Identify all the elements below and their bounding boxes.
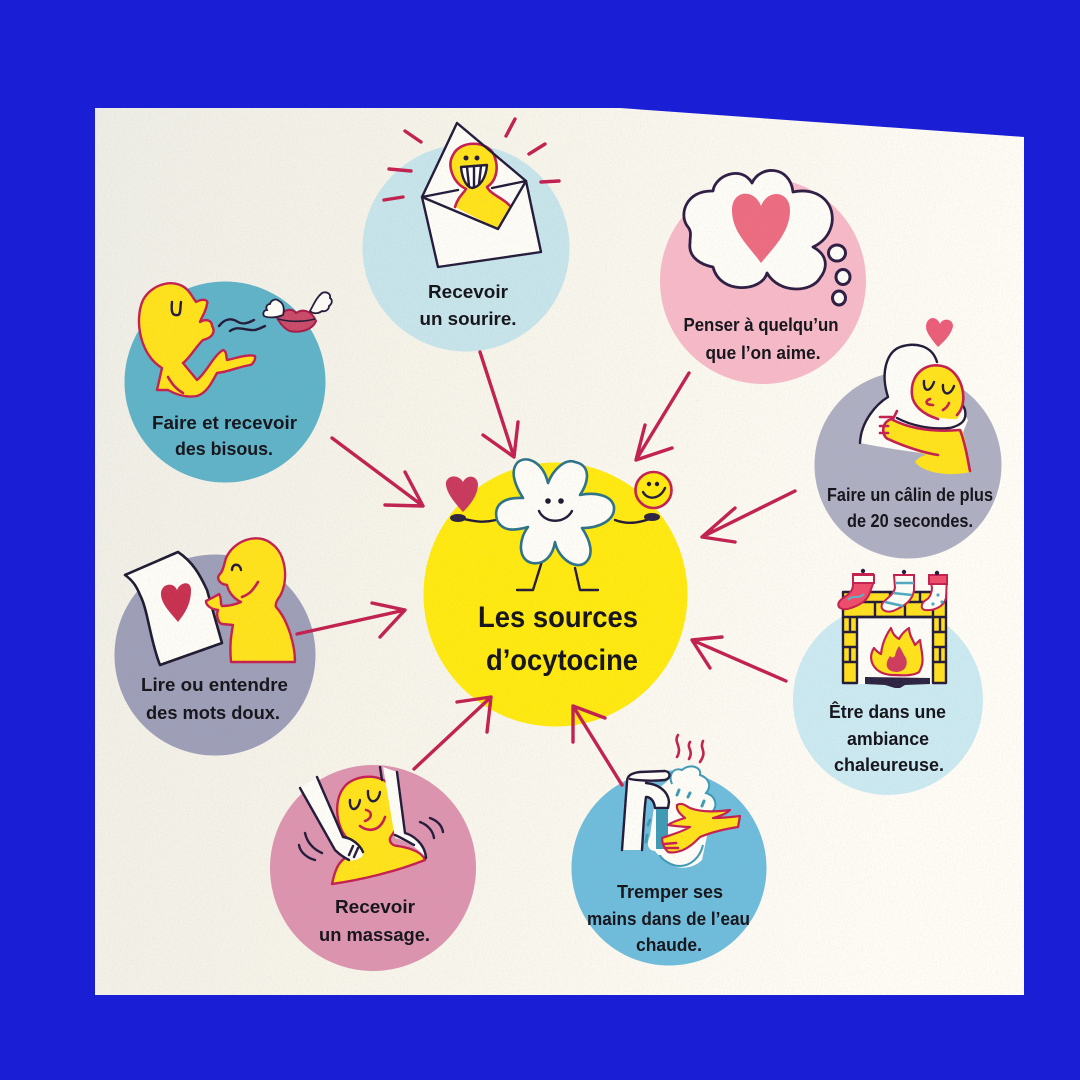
panel: recevoir un sourire bbox=[362, 119, 570, 352]
icon: flower mascot with heart and smiley bbox=[446, 459, 672, 590]
arrow: bisous bbox=[332, 438, 423, 506]
icon: massage figure bbox=[299, 767, 443, 884]
arrow: penser bbox=[636, 373, 689, 460]
title bbox=[478, 601, 638, 677]
arrow: tremper bbox=[573, 706, 622, 785]
label: bisous bbox=[152, 413, 297, 459]
title: d’ocytocine bbox=[486, 644, 638, 677]
label: ambiance bbox=[829, 701, 946, 775]
icon: tap with foam and hands bbox=[622, 766, 740, 868]
label: penser a quelqu'un: Penser à quelqu’un bbox=[684, 315, 838, 335]
icon: flying lips bbox=[263, 292, 332, 332]
label: tremper ses mains bbox=[587, 882, 750, 955]
label: ambiance: Être dans une bbox=[829, 701, 946, 722]
icon: person blowing a kiss bbox=[139, 283, 265, 397]
label: ambiance: chaleureuse. bbox=[834, 755, 944, 775]
panel: faire un calin bbox=[814, 318, 1002, 558]
panel: ambiance chaleureuse bbox=[793, 569, 983, 795]
panel: faire et recevoir des bisous bbox=[124, 282, 332, 482]
icon: hug bbox=[860, 318, 970, 474]
label: massage: un massage. bbox=[319, 925, 430, 945]
label: penser a quelqu'un: que l’on aime. bbox=[706, 343, 820, 363]
label: recevoir un sourire: un sourire. bbox=[420, 309, 516, 329]
label: tremper ses mains: chaude. bbox=[636, 935, 702, 955]
label: calin bbox=[827, 485, 993, 531]
label: massage: Recevoir bbox=[335, 897, 415, 917]
label: recevoir un sourire bbox=[420, 282, 516, 329]
icon: letter with heart bbox=[125, 552, 222, 665]
label: calin: Faire un câlin de plus bbox=[827, 485, 993, 505]
label: mots doux: des mots doux. bbox=[146, 703, 280, 723]
paper grain texture bbox=[95, 108, 1025, 996]
panel: central les sources d'ocytocine bbox=[424, 459, 688, 726]
label: tremper ses mains: mains dans de l’eau bbox=[587, 909, 750, 929]
icon: envelope with smiling figure bbox=[422, 123, 541, 267]
label: massage bbox=[319, 897, 430, 945]
panel: tremper ses mains bbox=[572, 735, 766, 966]
label: recevoir un sourire: Recevoir bbox=[428, 282, 508, 302]
icon: thought cloud with heart bbox=[684, 170, 850, 305]
icon: fireplace with stockings bbox=[838, 569, 947, 688]
title: Les sources bbox=[478, 601, 638, 634]
icon: steam bbox=[677, 735, 703, 762]
flame bbox=[871, 628, 923, 675]
icon: person reading bbox=[206, 538, 295, 662]
label: bisous: Faire et recevoir bbox=[152, 413, 297, 433]
label: ambiance: ambiance bbox=[847, 729, 929, 749]
panel: lire ou entendre des mots doux bbox=[114, 538, 316, 756]
stockings bbox=[838, 574, 873, 609]
label: mots doux bbox=[141, 675, 288, 723]
label: calin: de 20 secondes. bbox=[847, 511, 973, 531]
label: bisous: des bisous. bbox=[175, 439, 273, 459]
panel: recevoir un massage bbox=[270, 765, 476, 971]
arrow: sourire bbox=[480, 352, 518, 457]
arrow: massage bbox=[414, 697, 491, 769]
label: mots doux: Lire ou entendre bbox=[141, 675, 288, 695]
logs bbox=[865, 677, 930, 688]
paper page bbox=[95, 108, 1024, 995]
arrow: calin bbox=[702, 491, 795, 542]
arrow: mots doux bbox=[297, 603, 405, 637]
panel: penser a quelqu'un bbox=[660, 170, 866, 384]
arrow: ambiance bbox=[692, 637, 786, 681]
label: penser a quelqu'un bbox=[684, 315, 838, 363]
icon: smile rays bbox=[384, 119, 559, 200]
label: tremper ses mains: Tremper ses bbox=[617, 882, 723, 902]
